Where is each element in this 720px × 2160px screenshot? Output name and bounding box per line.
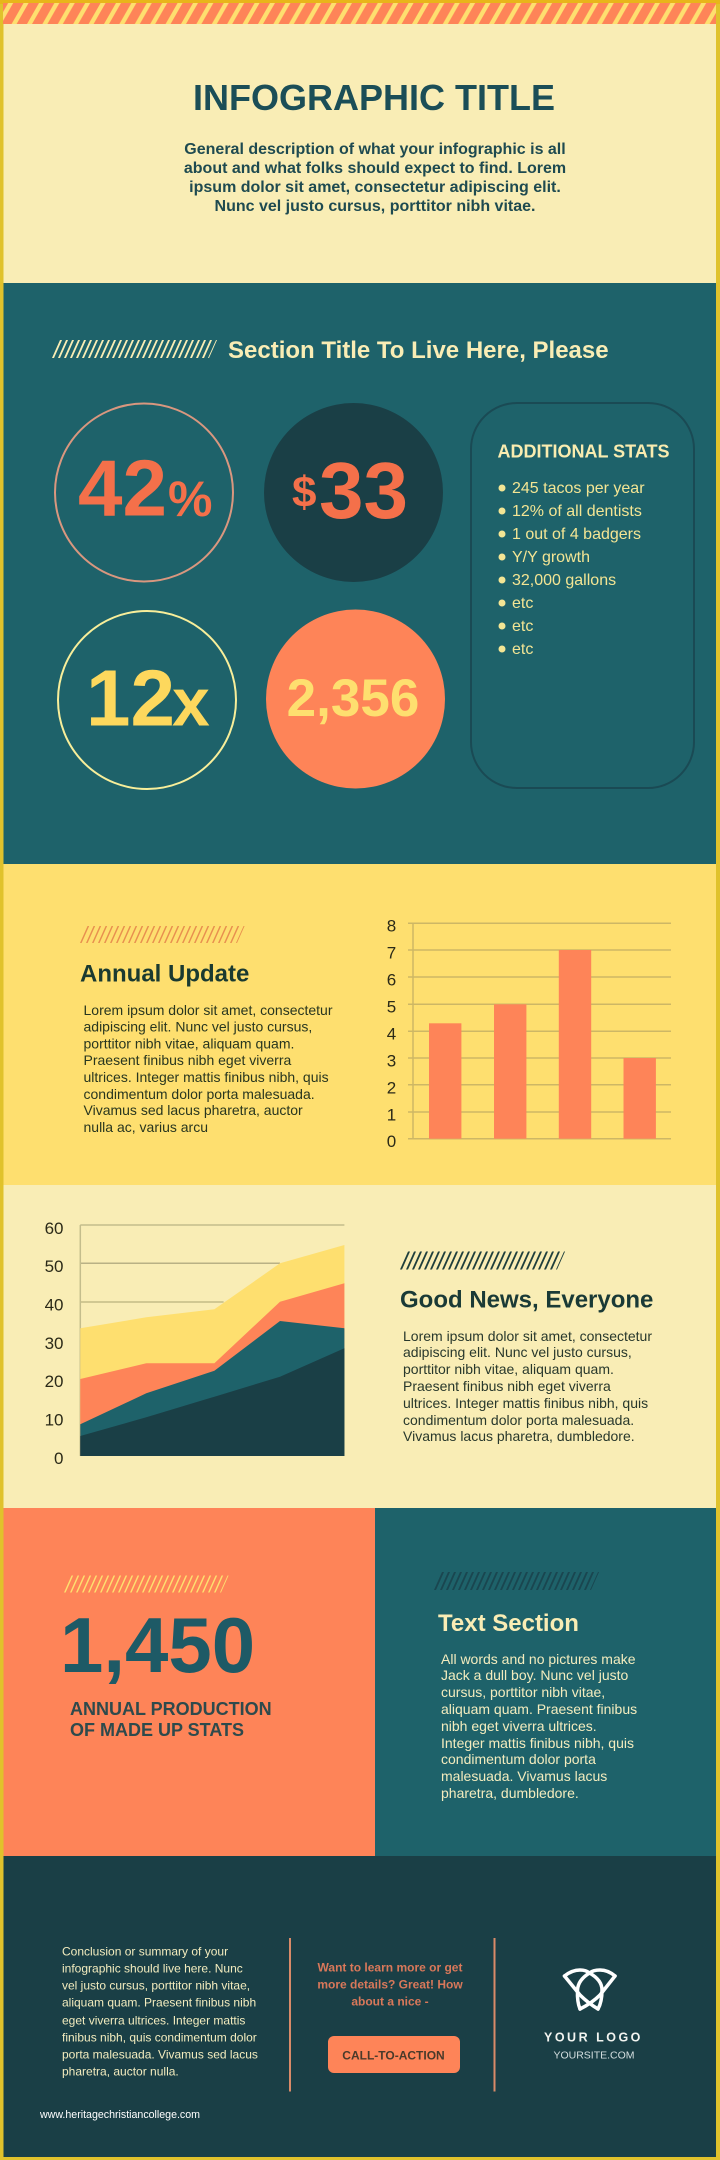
call to action button: CALL-TO-ACTION: [342, 2048, 445, 2062]
panel: text section: [375, 1508, 716, 1856]
stat circle: 42%: [55, 404, 233, 582]
hatch marks: [68, 1576, 225, 1592]
body text: porttitor nibh vitae, aliquam quam.: [84, 1036, 294, 1052]
conclusion text: finibus nibh, quis condimentum dolor: [62, 2030, 257, 2044]
conclusion text: vel justo cursus, porttitor nibh vitae,: [62, 1978, 250, 1992]
hatch marks: [84, 926, 241, 943]
bar chart: 4: [387, 1024, 396, 1044]
additional stats box: [471, 403, 694, 788]
hatch marks: [56, 340, 213, 358]
description: ipsum dolor sit amet, consectetur adipiscing elit.: [189, 179, 561, 196]
body text: condimentum dolor porta malesuada.: [403, 1412, 634, 1428]
body text: Integer mattis finibus nibh, quis: [441, 1735, 634, 1751]
body text: Lorem ipsum dolor sit amet, consectetur: [403, 1328, 652, 1344]
area chart: 10: [45, 1410, 64, 1430]
body text: condimentum dolor porta: [441, 1751, 596, 1767]
body text: condimentum dolor porta malesuada.: [84, 1086, 315, 1102]
conclusion text: infographic should live here. Nunc: [62, 1962, 243, 1976]
bar chart: 6: [387, 970, 396, 990]
body text: Praesent finibus nibh eget viverra: [84, 1052, 291, 1068]
stat circle: 12x: 12: [86, 654, 175, 742]
big number caption: OF MADE UP STATS: [70, 1720, 244, 1740]
box heading: ADDITIONAL STATS: [498, 442, 670, 462]
body text: adipiscing elit. Nunc vel justo cursus,: [403, 1344, 632, 1360]
area chart: [45, 1219, 344, 1468]
icon: logo: [564, 1970, 615, 2009]
bar chart: 7: [387, 944, 396, 962]
section title: Section Title To Live Here, Please: [228, 337, 609, 364]
bullet list: Y/Y growth: [512, 549, 590, 566]
conclusion text: eget viverra ultrices. Integer mattis: [62, 2014, 245, 2028]
heading: Good News, Everyone: [400, 1286, 653, 1314]
body text: All words and no pictures make: [441, 1651, 636, 1667]
area chart: 60: [45, 1219, 64, 1238]
title: INFOGRAPHIC TITLE: [193, 77, 555, 118]
body text: adipiscing elit. Nunc vel justo cursus,: [84, 1018, 312, 1034]
conclusion text: porta malesuada. Vivamus sed lacus: [62, 2048, 258, 2062]
body text: ultrices. Integer mattis finibus nibh, quis: [403, 1395, 648, 1411]
stat circle: 2,356: [266, 610, 445, 788]
stat circle: 42%: %: [168, 471, 212, 527]
panel: header: [4, 24, 716, 283]
stat circle: $33: [264, 403, 443, 582]
bar chart: 2: [387, 1078, 396, 1098]
panel: annual update: [4, 864, 716, 1185]
conclusion text: pharetra, auctor nulla.: [62, 2064, 179, 2078]
call to action prompt: about a nice -: [351, 1994, 429, 2008]
area chart: 30: [45, 1334, 64, 1353]
body text: nulla ac, varius arcu: [84, 1119, 208, 1135]
body text: porttitor nibh vitae, aliquam quam.: [403, 1361, 614, 1377]
call to action prompt: Want to learn more or get: [318, 1960, 462, 1974]
big number caption: ANNUAL PRODUCTION: [70, 1699, 272, 1719]
body text: Praesent finibus nibh eget viverra: [403, 1378, 611, 1394]
panel: footer: [4, 1856, 716, 2157]
header stripe band: [3, 3, 716, 24]
panel: big number: [4, 1508, 375, 1856]
bullet list: etc: [512, 618, 533, 635]
bullet list: etc: [512, 595, 533, 612]
description: about and what folks should expect to find. Lorem: [184, 160, 566, 177]
call to action prompt: more details? Great! How: [317, 1978, 463, 1992]
stat circle: $33: 33: [319, 446, 408, 535]
bar chart: 3: [387, 1052, 396, 1070]
bullet list: etc: [512, 641, 533, 658]
bar chart: 8: [387, 916, 396, 936]
big number: 1,450: [60, 1601, 255, 1689]
conclusion text: Conclusion or summary of your: [62, 1944, 228, 1958]
stat circle: $33: $: [292, 468, 316, 517]
area chart: 50: [45, 1257, 64, 1276]
body text: malesuada. Vivamus lacus: [441, 1768, 607, 1784]
panel: key stats: [4, 283, 716, 864]
body text: Vivamus lacus pharetra, dumbledore.: [403, 1428, 635, 1444]
body text: Jack a dull boy. Nunc vel justo: [441, 1667, 628, 1683]
bar chart: 0: [387, 1132, 396, 1151]
bullet list: 245 tacos per year: [512, 480, 645, 497]
area chart: 40: [45, 1296, 64, 1314]
panel: good news: [4, 1185, 716, 1508]
conclusion text: aliquam quam. Praesent finibus nibh: [62, 1996, 256, 2010]
bullet list: 1 out of 4 badgers: [512, 526, 641, 543]
body text: Vivamus sed lacus pharetra, auctor: [84, 1102, 303, 1118]
description: Nunc vel justo cursus, porttitor nibh vitae.: [215, 198, 535, 215]
description: General description of what your infographic is all: [184, 141, 566, 158]
area chart: 0: [54, 1449, 64, 1468]
stat circle: 2,356: 2,356: [287, 669, 419, 728]
body text: ultrices. Integer mattis finibus nibh, quis: [84, 1069, 329, 1085]
area chart: 20: [45, 1372, 64, 1391]
logo name: YOUR LOGO: [544, 2030, 643, 2044]
heading: Annual Update: [80, 960, 249, 988]
stat circle: 12x: x: [172, 664, 210, 740]
body text: aliquam quam. Praesent finibus: [441, 1701, 637, 1717]
hatch marks: [404, 1252, 561, 1270]
bullet list: 12% of all dentists: [512, 503, 642, 520]
call to action button: [328, 2036, 460, 2073]
body text: Lorem ipsum dolor sit amet, consectetur: [84, 1002, 333, 1018]
hatch marks: [438, 1572, 595, 1590]
stat circle: 12x: [58, 611, 236, 789]
heading: Text Section: [438, 1610, 579, 1637]
body text: cursus, porttitor nibh vitae,: [441, 1684, 605, 1700]
bullet list: [498, 480, 645, 658]
stat circle: 42%: 42: [78, 444, 167, 532]
bar chart: [387, 916, 671, 1151]
bar chart: 5: [387, 998, 396, 1016]
website: YOURSITE.COM: [553, 2050, 635, 2062]
bullet list: 32,000 gallons: [512, 572, 616, 589]
watermark url: www.heritagechristiancollege.com: [39, 2109, 200, 2121]
body text: nibh eget viverra ultrices.: [441, 1718, 597, 1734]
bar chart: 1: [387, 1106, 396, 1124]
body text: pharetra, dumbledore.: [441, 1785, 579, 1801]
